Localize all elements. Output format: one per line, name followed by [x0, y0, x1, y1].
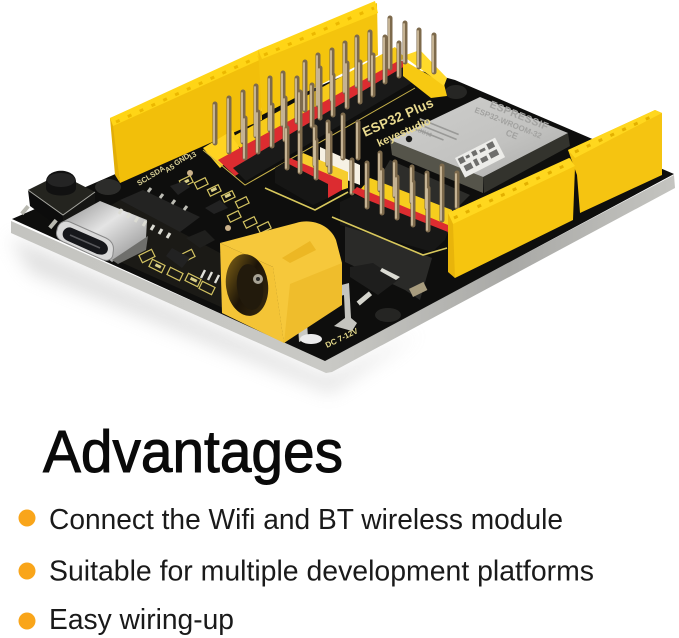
front yellow socket, right end — [568, 110, 662, 213]
rear header group — [203, 18, 447, 185]
right header group — [332, 153, 457, 255]
SOT regulator — [350, 263, 427, 305]
rear yellow socket, middle — [258, 1, 378, 115]
SOP chip — [119, 188, 200, 238]
silkscreen: product name: ESP32 Plus — [360, 95, 436, 140]
DC barrel jack — [220, 221, 342, 343]
right header pins — [366, 153, 457, 230]
module label text: CE — [504, 128, 520, 142]
product photo: ESP32 expansion board — [11, 1, 675, 373]
silkscreen: pin labels: SCL — [135, 172, 153, 188]
ESP32 module — [390, 97, 570, 193]
USB-C port — [56, 201, 148, 264]
board shadow — [10, 236, 420, 392]
silkscreen: product name: keyestudio — [375, 115, 433, 150]
silkscreen: pin labels: 13 — [186, 150, 198, 162]
module label text: XXH4 — [414, 126, 433, 139]
dark pcb tones under the right header — [345, 222, 432, 300]
tactile push button — [20, 171, 95, 230]
silkscreen: pin labels: SDA — [148, 163, 167, 180]
advantages list — [18, 504, 594, 636]
module label text: ESPRESSIF — [488, 99, 551, 133]
heading: Advantages: Advantages — [43, 419, 343, 485]
bullet item 2: Suitable for multiple development platforms — [49, 556, 594, 588]
bullet item 1: Connect the Wifi and BT wireless module — [49, 504, 563, 536]
rear yellow socket, left — [110, 50, 264, 183]
silkscreen: pin labels — [135, 150, 198, 188]
front yellow socket, centre — [448, 158, 575, 278]
mounting holes — [95, 179, 121, 195]
SMD components and traces — [139, 170, 271, 295]
silkscreen: voltage label: DC 7-12V — [324, 326, 360, 350]
module label text: ESP32-WROOM-32 — [473, 106, 543, 141]
jack metal tabs — [298, 283, 357, 344]
yellow three-pin header — [403, 60, 447, 98]
silkscreen: pin labels: GND — [172, 151, 192, 168]
circuit board — [11, 60, 675, 373]
bullet item 3: Easy wiring-up — [49, 604, 234, 636]
QR code — [455, 138, 505, 178]
header pins — [214, 18, 434, 158]
center header group — [265, 115, 360, 210]
silkscreen: pin labels: A5 — [163, 162, 176, 175]
center pins — [286, 115, 358, 193]
module label text — [414, 99, 551, 142]
